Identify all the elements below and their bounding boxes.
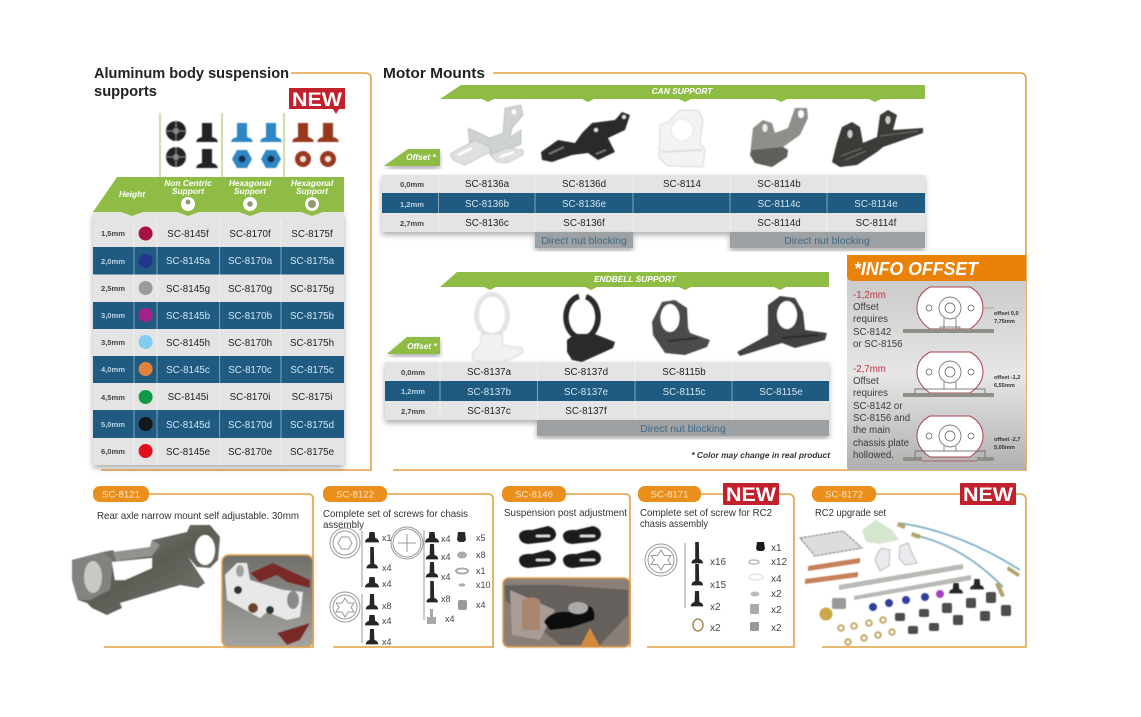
text: 2,7mm offset note: Offset	[853, 376, 879, 387]
table header: Support	[296, 186, 329, 196]
description: chasis assembly	[640, 519, 709, 530]
row 2,5mm	[101, 281, 334, 295]
screws and quantities: x4	[441, 572, 451, 582]
screws and quantities: x2	[771, 605, 782, 616]
row 3,0mm: SC-8170b	[228, 311, 273, 322]
description: Complete set of screws for chasis	[323, 509, 468, 520]
row 3,5mm: 3,5mm	[101, 338, 125, 347]
screws and quantities: x15	[710, 580, 727, 591]
screws and quantities: x8	[441, 594, 451, 604]
banner: can support	[440, 85, 925, 102]
row 4,5mm: SC-8170i	[230, 392, 270, 403]
screws and quantities: x5	[476, 533, 486, 543]
offset tag: endbell support: Offset *	[407, 341, 438, 351]
screws and quantities: x4	[382, 616, 392, 626]
row 3,0mm: 3,0mm	[101, 311, 125, 320]
description: RC2 upgrade set	[815, 508, 886, 519]
part: SC-8114e	[832, 110, 923, 167]
part: SC-8115e	[737, 296, 827, 356]
panel: SC-8122	[323, 486, 493, 647]
diagram: offset -1,2: 6,55mm	[994, 383, 1015, 389]
row 4,5mm: SC-8145i	[168, 392, 208, 403]
row 3,5mm: SC-8170h	[228, 338, 272, 349]
row 4,0mm: 4,0mm	[101, 365, 125, 374]
row 6,0mm: SC-8145e	[166, 447, 211, 458]
part: SC-8114b	[750, 108, 808, 167]
row 1,2mm: 1,2mm	[401, 387, 425, 396]
row 0,0mm: SC-8114	[663, 179, 702, 190]
table header: Height	[119, 189, 146, 199]
row 2,7mm	[400, 218, 897, 229]
diagram: offset -2,7: offset -2,7	[994, 437, 1020, 443]
description: Rear axle narrow mount self adjustable. 30mm	[97, 511, 299, 522]
table header: Support	[172, 186, 205, 196]
diagram: offset 0,0	[903, 287, 1019, 333]
row 4,5mm: SC-8175i	[292, 392, 332, 403]
row 1,5mm: 1,5mm	[101, 229, 125, 238]
panel: info offset	[847, 255, 1026, 470]
row 4,0mm	[101, 362, 334, 376]
screws and quantities: x10	[476, 580, 491, 590]
row 2,0mm: 2,0mm	[101, 257, 125, 266]
row 2,7mm: 2,7mm	[401, 407, 425, 416]
text: 1,2mm offset note: SC-8142	[853, 327, 891, 338]
diagram: offset -2,7	[903, 416, 1020, 461]
note: direct nut blocking 2: Direct nut blocking	[784, 236, 870, 247]
row 0,0mm	[400, 179, 801, 190]
screws and quantities: x2	[771, 589, 782, 600]
row 2,7mm: SC-8114f	[856, 218, 897, 229]
row 2,7mm: 2,7mm	[400, 219, 424, 228]
info header: *INFO OFFSET	[854, 258, 980, 279]
row 2,7mm: SC-8136f	[563, 218, 605, 229]
row 0,0mm: SC-8136d	[562, 179, 606, 190]
screws and quantities	[685, 542, 788, 634]
row 3,5mm: SC-8145h	[166, 338, 210, 349]
note: direct nut blocking 1	[535, 232, 633, 248]
label pill	[93, 486, 149, 502]
part: SC-8114	[659, 110, 705, 167]
screws and quantities: x2	[710, 623, 721, 634]
heading: aluminum body suspension supports	[94, 65, 289, 100]
table header: Hexagonal	[229, 178, 272, 188]
label pill: SC-8121	[102, 490, 140, 500]
offset tag: can support	[384, 149, 440, 166]
part: SC-8137d	[566, 296, 615, 362]
panel: SC-8146	[502, 486, 630, 647]
row 1,2mm: 1,2mm	[400, 200, 424, 209]
icon: hex drive	[330, 528, 360, 558]
banner: endbell support	[440, 272, 829, 290]
table header: Non Centric	[164, 178, 212, 188]
table: can support	[382, 175, 925, 232]
label pill: SC-8122	[336, 490, 374, 500]
row 2,0mm: SC-8175a	[290, 256, 335, 267]
row 5,0mm	[101, 417, 334, 431]
text: 2,7mm offset note: SC-8156 and	[853, 413, 910, 424]
new badge: NEW	[726, 485, 776, 506]
row 0,0mm: 0,0mm	[401, 368, 425, 377]
row 0,0mm: SC-8136a	[465, 179, 510, 190]
screws and quantities: x1	[771, 543, 782, 554]
new badge: suspension supports: NEW	[292, 90, 342, 111]
diagram: offset -1,2	[903, 352, 1020, 397]
row 6,0mm: SC-8175e	[290, 447, 335, 458]
note: direct nut blocking 1: Direct nut blocking	[541, 236, 627, 247]
heading: aluminum body suspension supports: supports	[94, 83, 157, 100]
row 1,2mm: SC-8137b	[467, 387, 512, 398]
heading: motor mounts: Motor Mounts	[383, 65, 485, 82]
screws and quantities: x2	[771, 623, 782, 634]
label pill	[502, 486, 566, 502]
diagram: offset -1,2: offset -1,2	[994, 375, 1020, 381]
row 5,0mm: SC-8175d	[290, 420, 334, 431]
description: assembly	[323, 520, 365, 531]
description: Suspension post adjustment	[504, 508, 627, 519]
product: four washers	[519, 526, 601, 568]
row 2,7mm: SC-8137f	[565, 406, 607, 417]
diagram: offset 0,0: offset 0,0	[994, 311, 1019, 317]
screws and quantities: x1	[382, 533, 392, 543]
note: direct nut blocking 2	[730, 232, 925, 248]
row 2,5mm: SC-8170g	[228, 284, 272, 295]
row 6,0mm: SC-8170e	[228, 447, 273, 458]
row 1,2mm: SC-8114c	[758, 199, 801, 210]
screws and quantities: x4	[382, 637, 392, 647]
row 0,0mm: 0,0mm	[400, 180, 424, 189]
row 1,2mm: SC-8114e	[854, 199, 898, 210]
screws and quantities: x8	[382, 601, 392, 611]
product: upgrade parts	[800, 520, 1020, 645]
row 3,5mm	[101, 335, 334, 349]
product: rear axle mount	[72, 525, 220, 615]
footnote: color disclaimer: * Color may change in real product	[691, 450, 831, 460]
note: direct nut blocking 3	[537, 420, 829, 436]
icon: black non centric supports	[166, 121, 218, 168]
label pill	[323, 486, 387, 502]
endbell support parts	[472, 294, 827, 363]
table header	[93, 177, 344, 216]
offset tag: endbell support	[387, 337, 440, 354]
row 2,5mm: 2,5mm	[101, 284, 125, 293]
row 1,5mm: SC-8145f	[167, 229, 209, 240]
text: 2,7mm offset note	[853, 364, 910, 461]
frame: body suspension supports	[101, 73, 371, 470]
part: SC-8136a	[450, 105, 523, 165]
row 4,5mm	[101, 390, 332, 404]
row 3,0mm: SC-8175b	[290, 311, 335, 322]
row 4,5mm: 4,5mm	[101, 393, 125, 402]
row 5,0mm: SC-8170d	[228, 420, 272, 431]
label pill: SC-8172	[825, 490, 863, 500]
row 0,0mm	[401, 367, 706, 378]
row 1,2mm: SC-8136b	[465, 199, 510, 210]
text: 2,7mm offset note: hollowed.	[853, 450, 894, 461]
row 1,5mm: SC-8170f	[229, 229, 271, 240]
text: 2,7mm offset note: requires	[853, 388, 888, 399]
row 5,0mm: SC-8145d	[166, 420, 210, 431]
description	[640, 508, 772, 530]
photo: mount installed	[222, 555, 313, 647]
row 6,0mm	[101, 444, 335, 458]
icon: red hexagonal supports	[292, 123, 339, 167]
description: Complete set of screw for RC2	[640, 508, 772, 519]
row 0,0mm: SC-8115b	[662, 367, 706, 378]
row 1,2mm	[401, 387, 803, 398]
row 1,2mm: SC-8115e	[759, 387, 803, 398]
label pill: SC-8171	[651, 490, 688, 500]
screws and quantities: x4	[771, 574, 782, 585]
offset tag: can support: Offset *	[406, 152, 437, 162]
panel: SC-8171	[638, 483, 794, 647]
row 1,2mm: SC-8137e	[564, 387, 609, 398]
text: 2,7mm offset note: chassis plate	[853, 438, 909, 449]
row 3,0mm: SC-8145b	[166, 311, 211, 322]
row 2,0mm: SC-8170a	[228, 256, 273, 267]
row 2,7mm: SC-8114d	[757, 218, 801, 229]
panel: SC-8121	[72, 486, 313, 647]
diagram: offset -2,7: 5,05mm	[994, 445, 1015, 451]
panel: SC-8172	[800, 483, 1026, 647]
text: 1,2mm offset note: Offset	[853, 302, 879, 313]
icon: blue hexagonal supports	[231, 123, 282, 168]
row 2,5mm: SC-8145g	[166, 284, 210, 295]
text: 1,2mm offset note: requires	[853, 314, 888, 325]
screws and quantities	[362, 530, 491, 647]
row 2,0mm	[101, 254, 335, 268]
info header	[847, 255, 1026, 281]
screws and quantities: x4	[441, 534, 451, 544]
row 2,7mm: SC-8136c	[465, 218, 509, 229]
row 1,2mm	[400, 199, 898, 210]
row 0,0mm: SC-8114b	[757, 179, 801, 190]
photo: washer installed	[503, 578, 630, 647]
text: 2,7mm offset note: SC-8142 or	[853, 401, 903, 412]
text: 1,2mm offset note: -1,2mm	[853, 290, 886, 301]
screws and quantities: x12	[771, 557, 788, 568]
part: SC-8115b	[652, 300, 710, 355]
alternating blue rows	[93, 247, 344, 438]
label pill	[812, 486, 876, 502]
frame: motor mounts	[393, 73, 1026, 470]
table: body suspension supports	[93, 177, 344, 465]
screws and quantities: x4	[382, 563, 392, 573]
row 0,0mm: SC-8137d	[564, 367, 608, 378]
row 1,2mm: SC-8136e	[562, 199, 607, 210]
text: 2,7mm offset note: the main	[853, 425, 890, 436]
banner: can support: CAN SUPPORT	[652, 86, 713, 96]
heading: aluminum body suspension supports: Aluminum body suspension	[94, 65, 289, 82]
row 1,5mm: SC-8175f	[291, 229, 333, 240]
row 6,0mm: 6,0mm	[101, 447, 125, 456]
part: SC-8137a	[472, 294, 523, 363]
screws and quantities: x4	[476, 600, 486, 610]
label pill	[638, 486, 701, 502]
screws and quantities: x4	[382, 579, 392, 589]
banner: endbell support: ENDBELL SUPPORT	[594, 274, 677, 284]
row 2,5mm: SC-8175g	[290, 284, 334, 295]
text: 1,2mm offset note: or SC-8156	[853, 339, 903, 350]
text: 2,7mm offset note: -2,7mm	[853, 364, 886, 375]
row 2,0mm: SC-8145a	[166, 256, 211, 267]
can support parts	[450, 105, 923, 167]
label pill: SC-8146	[515, 490, 553, 500]
diagram: offset 0,0: 7,75mm	[994, 319, 1015, 325]
screws and quantities: x16	[710, 557, 727, 568]
icon: phillips drive	[391, 527, 423, 559]
table: endbell support	[385, 362, 829, 420]
screws and quantities: x4	[445, 614, 455, 624]
row 2,7mm	[401, 406, 607, 417]
icon: torx drive	[330, 592, 360, 622]
description	[323, 509, 468, 531]
icon: torx drive	[645, 544, 677, 576]
row 4,0mm: SC-8170c	[228, 365, 272, 376]
row 3,0mm	[101, 308, 335, 322]
new badge: suspension supports	[289, 88, 345, 114]
product images: suspension supports	[160, 113, 339, 177]
part: SC-8136d	[541, 112, 630, 162]
row 2,7mm: SC-8137c	[467, 406, 511, 417]
text: 1,2mm offset note	[853, 290, 903, 350]
screws and quantities: x8	[476, 550, 486, 560]
row 1,5mm	[101, 226, 333, 240]
screws and quantities: x1	[476, 566, 486, 576]
row 5,0mm: 5,0mm	[101, 420, 125, 429]
table header: Hexagonal	[291, 178, 334, 188]
row 0,0mm: SC-8137a	[467, 367, 512, 378]
note: direct nut blocking 3: Direct nut blocking	[640, 424, 726, 435]
row 4,0mm: SC-8145c	[166, 365, 210, 376]
row 3,5mm: SC-8175h	[290, 338, 334, 349]
screws and quantities: x2	[710, 602, 721, 613]
table header: Support	[234, 186, 267, 196]
new badge: NEW	[963, 485, 1013, 506]
row 4,0mm: SC-8175c	[290, 365, 334, 376]
row 1,2mm: SC-8115c	[663, 387, 706, 398]
screws and quantities: x4	[441, 552, 451, 562]
